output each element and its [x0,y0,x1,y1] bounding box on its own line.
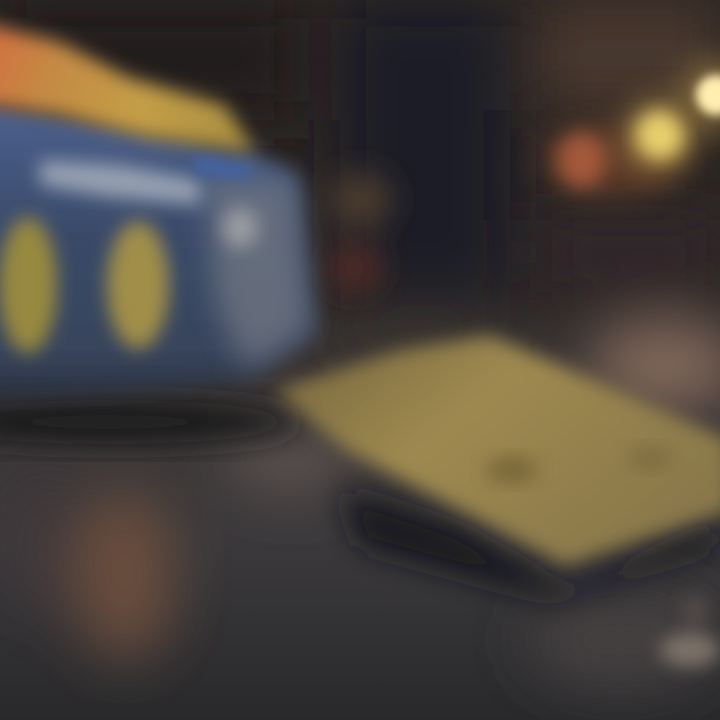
holder body [0,100,316,400]
rainbow top band [0,20,255,152]
blue band [195,155,250,180]
background objects: small red and tan smudges [327,172,392,294]
card body [275,335,720,565]
floor: lower reflections [5,425,715,690]
background glow: wall tones [0,0,720,410]
holder right side, pale [205,175,310,370]
right yellow oval [107,221,169,349]
white strip [40,160,200,205]
card shadow [340,490,720,600]
holder shadow [0,400,300,444]
left yellow oval [0,217,57,353]
card chip marks [486,456,538,484]
bright spot [222,208,258,248]
lights: glowing bokeh [540,59,720,195]
icon: blurred wallet holder [0,20,316,444]
icon: blurred gold card [275,335,720,600]
floor mark: pale smudge bottom right [660,596,720,667]
